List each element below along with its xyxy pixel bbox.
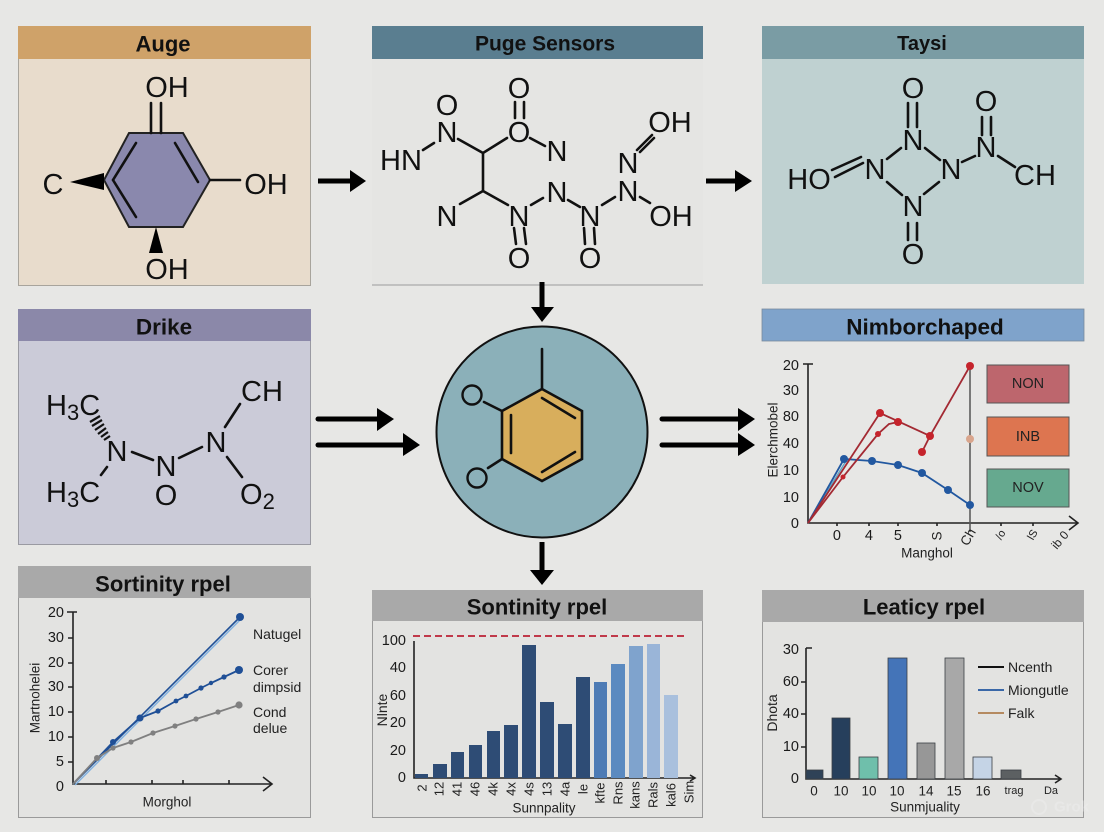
heading: Puge Sensors: Puge Sensors <box>475 32 615 56</box>
line chart: Sortinity: delue <box>253 720 287 736</box>
bar chart: Sontinity: Nlnte <box>374 693 390 726</box>
line chart: Nimborchaped: 10 <box>783 490 799 506</box>
heading: Taysi: Taysi <box>897 33 947 55</box>
molecule: Taysi ring: N <box>941 154 961 186</box>
molecule: Taysi ring: O <box>975 86 997 118</box>
molecule: Puge Sensors chain: N <box>509 201 529 233</box>
chart legend: Ncenth <box>1008 659 1052 675</box>
watermark: Grok <box>1032 798 1090 816</box>
line chart: Nimborchaped: 5 <box>894 528 902 544</box>
bar chart: Sontinity: Sunnpality <box>512 800 576 816</box>
line chart: Nimborchaped: Elerchmobel <box>766 402 780 478</box>
arrows: Drike into core <box>318 408 420 456</box>
bar chart: Sontinity: 4x <box>504 782 518 796</box>
panel: Leaticy rpel bar chart <box>762 590 1084 818</box>
molecule: Drike chain: CH <box>241 376 283 408</box>
molecule: Taysi ring: CH <box>1014 160 1056 192</box>
molecule: Puge Sensors chain: N <box>618 176 638 208</box>
line chart: Sortinity: 20 <box>48 655 64 671</box>
heading: Leaticy rpel <box>762 590 1084 622</box>
molecule: Puge Sensors chain: N <box>547 177 567 209</box>
arrows: core to Nimborchaped <box>662 408 755 456</box>
bar chart: Leaticy: 10 <box>861 784 877 798</box>
bar chart: Sontinity: 40 <box>390 660 406 676</box>
molecule: Drike chain: H <box>46 390 67 422</box>
molecule: Taysi ring: N <box>903 125 923 157</box>
bar chart: Leaticy: 0 <box>791 771 799 787</box>
heading: Drike: Drike <box>136 314 192 340</box>
heading: Taysi <box>762 26 1084 59</box>
molecule: Puge Sensors chain: HN <box>380 145 422 177</box>
line chart: Sortinity <box>28 605 301 810</box>
arrow: Puge Sensors down to core <box>531 282 554 322</box>
chart legend: Falk <box>1008 705 1035 721</box>
molecule: Puge Sensors chain: O <box>579 243 601 275</box>
line chart: Sortinity: 5 <box>56 754 64 770</box>
line chart: Sortinity: 0 <box>56 779 64 795</box>
line chart: Nimborchaped: 4 <box>865 528 873 544</box>
bar chart: Sontinity: 0 <box>398 770 406 786</box>
bar chart: Sontinity: Rals <box>646 782 660 808</box>
panel: Taysi <box>762 26 1084 284</box>
molecule: Auge ring: OH <box>145 254 189 286</box>
arrow: Puge Sensors to Taysi <box>706 170 752 192</box>
molecule: Taysi ring <box>787 73 1056 271</box>
line chart: Sortinity: 30 <box>48 630 64 646</box>
molecule: Taysi ring: O <box>902 73 924 105</box>
bar chart: Leaticy: 16 <box>975 784 991 798</box>
line chart: Sortinity: Martnohelei <box>28 663 42 733</box>
central core molecule circle <box>436 326 648 538</box>
bar chart: Sontinity: 41 <box>450 782 464 796</box>
line chart: Nimborchaped: Manghol <box>901 546 953 560</box>
molecule: Drike chain: 2 <box>263 488 275 514</box>
molecule: Puge Sensors chain: N <box>580 201 600 233</box>
chart legend: Miongutle <box>1008 682 1069 698</box>
line chart: Nimborchaped: 0 <box>833 528 841 544</box>
molecule: Puge Sensors chain: OH <box>648 107 692 139</box>
bar chart: Sontinity: kal6 <box>664 783 678 807</box>
line chart: Nimborchaped: 20 <box>783 358 799 374</box>
molecule: Auge ring: C <box>43 169 63 201</box>
panel: Puge Sensors <box>372 26 703 285</box>
line chart: Sortinity: 10 <box>48 729 64 745</box>
bar chart: Sontinity: 20 <box>390 743 406 759</box>
bar chart: Leaticy <box>764 642 1069 814</box>
line chart: Sortinity: dimpsid <box>253 679 301 695</box>
bar chart: Sontinity: 13 <box>540 782 554 796</box>
panel: Drike <box>18 309 311 544</box>
molecule: Taysi ring: N <box>976 132 996 164</box>
line chart: Sortinity: Corer <box>253 662 288 678</box>
molecule: Puge Sensors chain: N <box>437 201 457 233</box>
molecule: Drike chain: N <box>156 451 176 483</box>
molecule: Drike chain: O <box>155 480 177 512</box>
bar chart: Leaticy: Sunmjuality <box>890 800 960 814</box>
bar chart: Sontinity: 4k <box>486 782 500 796</box>
molecule: Puge Sensors chain <box>380 73 693 275</box>
bar chart: Sontinity: 4a <box>558 781 572 796</box>
line chart: Nimborchaped: lS <box>1025 528 1041 542</box>
arrow: Auge to Puge Sensors <box>318 170 366 192</box>
legend box: INB <box>987 417 1069 456</box>
heading: Auge: Auge <box>136 32 190 56</box>
molecule: Puge Sensors chain: OH <box>649 201 693 233</box>
molecule: Drike chain: N <box>107 436 127 468</box>
bar chart: Sontinity: kans <box>628 781 642 809</box>
heading: Puge Sensors <box>372 26 703 59</box>
bar chart: Leaticy: Da <box>1044 785 1059 797</box>
molecule: Drike chain <box>46 376 283 514</box>
line chart: Sortinity: Cond <box>253 704 286 720</box>
bar chart: Sontinity: kfte <box>592 783 608 803</box>
line chart: Nimborchaped: S <box>930 531 944 541</box>
chart legend <box>978 659 1069 721</box>
line chart: Nimborchaped: 0 <box>791 516 799 532</box>
heading: Sontinity rpel <box>372 590 703 621</box>
molecule: Drike chain: C <box>79 390 100 422</box>
molecule: Puge Sensors chain: O <box>508 117 530 149</box>
line chart: Nimborchaped: 30 <box>783 383 799 399</box>
line chart: Nimborchaped: 80 <box>783 409 799 425</box>
bar chart: Leaticy: 0 <box>810 784 818 798</box>
molecule: Drike chain: O <box>240 479 263 511</box>
molecule: Auge ring <box>43 72 288 286</box>
legend box: NON: NON <box>1012 376 1044 392</box>
molecule: Drike chain: N <box>206 427 226 459</box>
line chart: Nimborchaped: 40 <box>783 436 799 452</box>
bar chart: Sontinity: Rns <box>610 781 626 805</box>
legend box: INB: INB <box>1016 429 1040 445</box>
heading: Drike <box>18 309 311 341</box>
bar chart: Sontinity: 100 <box>382 633 406 649</box>
bar chart: Leaticy: Dhota <box>764 694 780 732</box>
line chart: Sortinity: 30 <box>48 679 64 695</box>
bar chart: Leaticy: 10 <box>783 739 799 755</box>
molecule: Taysi ring: HO <box>787 164 831 196</box>
panel: Sontinity rpel bar chart <box>372 590 703 818</box>
bar chart: Leaticy: 15 <box>946 784 962 798</box>
panel: Auge <box>18 26 311 286</box>
heading: Leaticy rpel: Leaticy rpel <box>863 594 985 620</box>
molecule: Puge Sensors chain: N <box>618 148 638 180</box>
legend box: NOV: NOV <box>1012 480 1044 496</box>
bar chart: Sontinity: 46 <box>468 782 482 796</box>
bar chart: Sontinity: 12 <box>432 782 446 796</box>
line chart: Nimborchaped: Ch <box>957 526 979 548</box>
bar chart: Leaticy: 10 <box>889 784 905 798</box>
molecule: Drike chain: C <box>79 477 100 509</box>
bar chart: Leaticy: 40 <box>783 706 799 722</box>
bar chart: Sontinity: 20 <box>390 715 406 731</box>
molecule: Drike chain: 3 <box>67 486 79 512</box>
line chart: Nimborchaped <box>766 358 1078 560</box>
heading: Sortinity rpel <box>18 566 311 598</box>
bar chart: Leaticy: 30 <box>783 642 799 658</box>
bar chart: Leaticy: 10 <box>833 784 849 798</box>
bar chart: Sontinity <box>374 633 696 816</box>
heading: Sontinity rpel: Sontinity rpel <box>467 594 607 620</box>
heading: Nimborchaped <box>762 309 1084 341</box>
molecule: Auge ring: OH <box>145 72 189 104</box>
bar chart: Leaticy: trag <box>1005 785 1023 797</box>
molecule: Puge Sensors chain: O <box>508 73 530 105</box>
molecule: Puge Sensors chain: N <box>547 136 567 168</box>
watermark: Grok: Grok <box>1054 798 1090 816</box>
molecule: Puge Sensors chain: O <box>436 90 458 122</box>
molecule: Puge Sensors chain: N <box>437 117 457 149</box>
molecule: Auge ring: OH <box>244 169 288 201</box>
line chart: Nimborchaped: ib 0 <box>1048 528 1072 552</box>
line chart: Sortinity: Natugel <box>253 626 301 642</box>
bar chart: Sontinity: Sim <box>682 781 696 803</box>
bar chart: Sontinity: 2 <box>414 784 430 792</box>
arrow: core down to Sontinity chart <box>530 542 554 585</box>
heading: Sortinity rpel: Sortinity rpel <box>95 572 231 596</box>
bar chart: Sontinity: le <box>576 784 590 794</box>
bar chart: Sontinity: 4s <box>522 782 536 796</box>
molecule: Taysi ring: N <box>903 191 923 223</box>
line chart: Nimborchaped: 10 <box>783 463 799 479</box>
line chart: Sortinity: 10 <box>48 704 64 720</box>
line chart: Sortinity: Morghol <box>143 794 191 810</box>
line chart: Nimborchaped: /o <box>994 528 1008 542</box>
molecule: Taysi ring: N <box>865 154 885 186</box>
molecule: Drike chain: 3 <box>67 400 79 424</box>
heading: Nimborchaped: Nimborchaped <box>846 314 1004 340</box>
panel: Nimborchaped <box>762 309 1084 560</box>
legend box: NON <box>987 365 1069 403</box>
heading: Auge <box>18 26 311 59</box>
bar chart: Sontinity: 60 <box>390 688 406 704</box>
molecule: Drike chain: H <box>46 477 67 509</box>
molecule: Taysi ring: O <box>902 239 924 271</box>
molecule: Puge Sensors chain: O <box>508 243 530 275</box>
bar chart: Leaticy: 14 <box>918 784 934 798</box>
bar chart: Leaticy: 60 <box>783 674 799 690</box>
panel: Sortinity rpel line chart <box>18 566 311 818</box>
line chart: Sortinity: 20 <box>48 605 64 621</box>
legend box: NOV <box>987 469 1069 507</box>
